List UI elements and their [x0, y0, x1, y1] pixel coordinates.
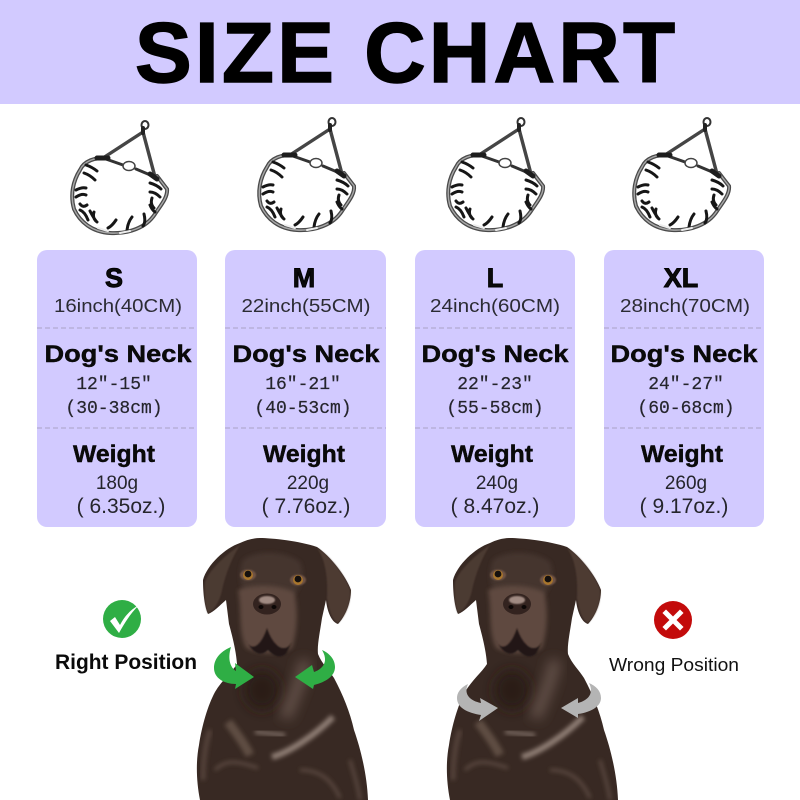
- weight values M: ( 7.76oz.): [262, 495, 350, 518]
- weight values L: ( 8.47oz.): [451, 495, 539, 518]
- icon: green check: [103, 600, 141, 638]
- length M: 22inch(55CM): [242, 296, 370, 316]
- size name L: L: [487, 263, 503, 293]
- icon: collar L: [448, 118, 543, 230]
- dog: right position: [197, 538, 368, 800]
- panel: size M: [225, 250, 386, 527]
- icon: red cross: [654, 601, 692, 639]
- arrow: grey left: [457, 684, 498, 721]
- neck values M: [254, 375, 352, 419]
- neck values S: [65, 375, 163, 419]
- arrow: grey right: [561, 683, 601, 718]
- neck values L: (55-58cm): [446, 399, 544, 419]
- neck heading XL: Dog's Neck: [610, 341, 758, 368]
- label: wrong position: Wrong Position: [609, 655, 739, 675]
- label: right position: Right Position: [55, 651, 197, 674]
- panel: size L: [415, 250, 575, 527]
- icon: collar S: [72, 121, 167, 233]
- dog: wrong position: [447, 538, 618, 800]
- weight values S: [77, 473, 165, 518]
- neck heading M: Dog's Neck: [232, 341, 380, 368]
- weight heading M: Weight: [263, 441, 345, 468]
- panel: size XL: [604, 250, 764, 527]
- weight values M: 220g: [287, 473, 329, 494]
- arrow: green right: [295, 650, 335, 689]
- weight values XL: [640, 473, 728, 518]
- size name S: S: [105, 263, 123, 293]
- weight values S: ( 6.35oz.): [77, 495, 165, 518]
- neck values XL: 24"-27": [648, 375, 724, 395]
- icon: collar M: [259, 118, 354, 230]
- weight values S: 180g: [96, 473, 138, 494]
- size name M: M: [293, 263, 315, 293]
- length L: 24inch(60CM): [430, 296, 560, 316]
- icon: collar XL: [634, 118, 729, 230]
- arrow: green left: [214, 647, 254, 689]
- neck heading L: Dog's Neck: [422, 341, 569, 368]
- size name XL: XL: [664, 263, 698, 293]
- neck values S: (30-38cm): [65, 399, 163, 419]
- length XL: 28inch(70CM): [620, 296, 750, 316]
- weight values M: [262, 473, 350, 518]
- neck values L: 22"-23": [457, 375, 533, 395]
- neck values S: 12"-15": [76, 375, 152, 395]
- neck values M: (40-53cm): [254, 399, 352, 419]
- neck values L: [446, 375, 544, 419]
- weight values L: 240g: [476, 473, 518, 494]
- length S: 16inch(40CM): [54, 296, 182, 316]
- weight heading L: Weight: [451, 441, 533, 468]
- neck values M: 16"-21": [265, 375, 341, 395]
- weight heading S: Weight: [73, 441, 155, 468]
- title banner: [0, 0, 800, 104]
- panel: size S: [37, 250, 197, 527]
- weight values L: [451, 473, 539, 518]
- weight values XL: 260g: [665, 473, 707, 494]
- neck values XL: (60-68cm): [637, 399, 735, 419]
- weight heading XL: Weight: [641, 441, 723, 468]
- weight values XL: ( 9.17oz.): [640, 495, 728, 518]
- title: SIZE CHART: [135, 6, 677, 101]
- neck values XL: [637, 375, 735, 419]
- neck heading S: Dog's Neck: [44, 341, 192, 368]
